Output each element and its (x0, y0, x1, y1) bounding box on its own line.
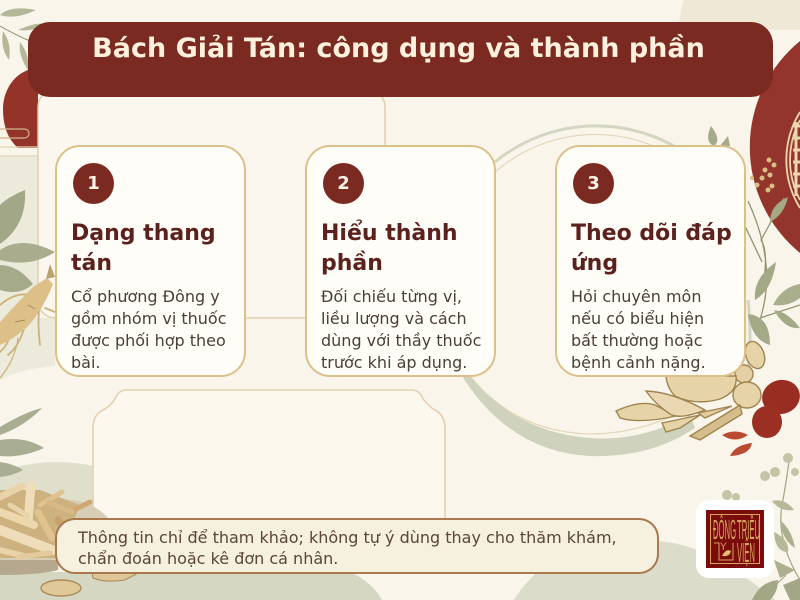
card 1 body: được phối hợp theo (71, 331, 226, 350)
left large leaves (0, 190, 55, 292)
lower scalloped frame panel (93, 390, 445, 520)
title: Bách Giải Tán: công dụng và thành phần (92, 33, 705, 64)
card 3 body: Hỏi chuyên môn (571, 287, 701, 306)
header banner (28, 22, 773, 97)
card 2 body (321, 287, 481, 372)
disclaimer text: Thông tin chỉ để tham khảo; không tự ý dùng thay cho thăm khám, (78, 528, 617, 547)
disclaimer text: chẩn đoán hoặc kê đơn cá nhân. (78, 549, 338, 568)
card 2 heading: Hiểu thành phần (321, 221, 458, 276)
brush ring (470, 126, 750, 434)
logo badge (696, 500, 774, 578)
number badge 2 (323, 163, 364, 204)
card 3 heading: Theo dõi đáp ứng (571, 221, 732, 276)
right foliage (708, 126, 800, 345)
number badge 1 (73, 163, 114, 204)
card 1 body: gồm nhóm vị thuốc (71, 309, 226, 328)
number badge 3: 3 (587, 173, 600, 194)
dried herb slices and fruits (616, 339, 800, 456)
card 1 heading: Dạng thang tán (71, 221, 216, 276)
card 1 body (71, 287, 226, 372)
card 1 body: Cổ phương Đông y (71, 287, 220, 306)
card 3 body: bất thường hoặc (571, 331, 703, 350)
left frame lines (0, 129, 40, 156)
card 2 body: trước khi áp dụng. (321, 353, 467, 372)
card 2 body: dùng với thầy thuốc (321, 331, 481, 350)
logo badge: Y (720, 542, 727, 553)
card 2 (305, 145, 496, 377)
bottom-right green wash (514, 540, 775, 600)
top-right beige circle (679, 0, 800, 30)
card 2 body: Đối chiếu từng vị, (321, 287, 462, 306)
card 3 body (571, 287, 706, 372)
logo badge: ĐÔNG (713, 514, 736, 546)
card 3 body: bệnh cảnh nặng. (571, 353, 706, 372)
bottom green wash (0, 572, 382, 600)
right big red circle (750, 41, 800, 253)
card 3 (555, 145, 746, 377)
upper frame panel (38, 90, 385, 318)
card 2 body: liều lượng và cách (321, 309, 467, 328)
dried slices bottom (41, 573, 138, 596)
number badge 3 (573, 163, 614, 204)
left green wash (0, 157, 55, 380)
disclaimer text (78, 528, 617, 568)
brush ring sweep (462, 376, 695, 456)
bowl of dried herb (0, 485, 110, 575)
left red circle (3, 68, 38, 148)
number badge 1: 1 (87, 173, 100, 194)
top-left leaves (0, 8, 44, 70)
bottom-right foliage (722, 453, 800, 600)
card 1 (55, 145, 246, 377)
fern (0, 408, 44, 477)
logo badge: TRIỀU (737, 514, 760, 546)
number badge 2: 2 (337, 173, 350, 194)
bottom-left green hill (0, 462, 93, 525)
disclaimer note (55, 518, 659, 574)
card 3 body: nếu có biểu hiện (571, 309, 704, 328)
logo badge: VIỆN (737, 537, 755, 568)
ginseng root (0, 264, 55, 378)
card 1 body: bài. (71, 353, 100, 372)
